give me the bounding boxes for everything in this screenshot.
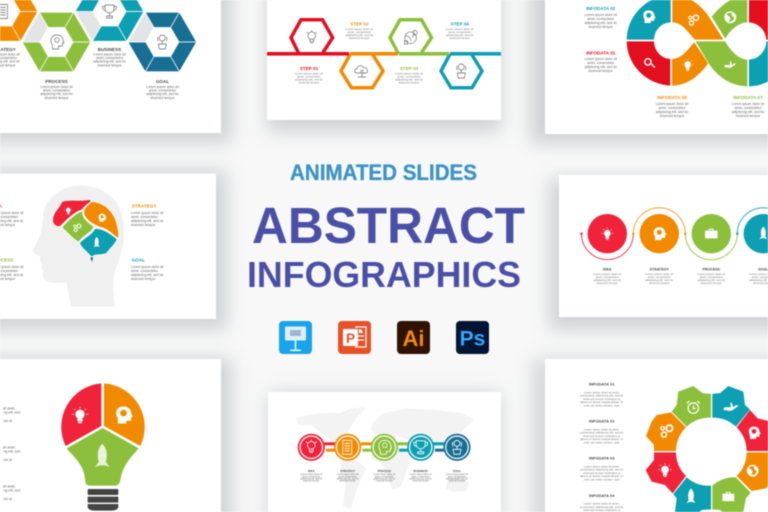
process text: eiusmod tempor [701, 281, 722, 285]
infodata 02 text: eiusmod tempor incididunt ut [583, 434, 620, 438]
infodata 07 text: INFODATA 07 [733, 95, 763, 100]
step 04 text: STEP 04 [451, 22, 469, 26]
map strategy text [337, 469, 359, 483]
infodata 01 text: INFODATA 01 [589, 382, 615, 386]
strategy text: Lorem ipsum dolor sit [131, 211, 163, 215]
light bulb [61, 383, 145, 511]
map circle idea [298, 434, 325, 461]
strategy text: STRATEGY [650, 268, 670, 272]
infodata 02 text: adipiscing elit, sed do [584, 21, 617, 25]
step 03 text: adipiscing elit, sed do [395, 78, 423, 82]
left text 3: ore at [3, 497, 12, 501]
step hexagon 4 [441, 54, 482, 88]
goal text [131, 258, 164, 281]
left text 3: sit amet, [3, 484, 16, 488]
infodata 02 text: amet, consectetur [587, 17, 615, 21]
panel: hexagon process slide [0, 0, 232, 143]
head and brain [33, 186, 124, 307]
map business text: adipiscing elit, sed do [410, 478, 432, 480]
infodata 03 text: consectetur adipiscing elit, sed do [580, 468, 624, 472]
map goal text: adipiscing elit, sed do [446, 478, 469, 480]
infodata 04 text: INFODATA 04 [589, 493, 615, 498]
step 03 text: STEP 03 [400, 66, 419, 71]
label: process: amet, consectetur [43, 89, 71, 93]
label: goal: GOAL [156, 79, 169, 84]
infodata 08 text [656, 95, 688, 118]
icon: illustrator: Ai [402, 326, 424, 351]
map strategy text: STRATEGY [340, 469, 355, 473]
step 03 text [395, 66, 423, 84]
infodata 01 text: INFODATA 01 [586, 50, 616, 56]
hexagon: goal [128, 12, 197, 72]
circle panel card [559, 175, 768, 317]
infodata 03 text: eiusmod tempor incididunt ut [583, 471, 620, 475]
infodata 07 text [732, 95, 764, 118]
infodata 01 text: adipiscing elit, sed do [584, 65, 617, 69]
infodata 02 text: enim ad minim veniam, quis [584, 440, 620, 444]
strategy text: Lorem ipsum dolor sit [645, 272, 673, 276]
connecting path [582, 208, 768, 260]
connector bars [324, 442, 446, 452]
process text [0, 258, 24, 281]
step 02 text: STEP 02 [350, 22, 369, 26]
title line 2: INFOGRAPHICS [247, 254, 521, 295]
idea text [593, 268, 622, 285]
map circle business [407, 434, 434, 461]
strategy text: adipiscing elit, sed do [131, 219, 164, 223]
icon: powerpoint [338, 321, 371, 354]
bulb panel card [0, 359, 221, 512]
circle panel shadow [549, 178, 768, 330]
path nodes [580, 232, 739, 235]
timeline panel card [267, 0, 501, 120]
title line 1: ABSTRACT [252, 197, 525, 254]
step 02 text: Lorem ipsum dolor sit [345, 27, 373, 31]
step hexagon 1 [291, 20, 333, 54]
label: business [93, 47, 126, 67]
step 01 text: STEP 01 [300, 66, 319, 71]
map idea text: amet, consectetur [302, 475, 321, 478]
map process text: amet, consectetur [375, 475, 394, 478]
infodata 07 text: amet, consectetur [735, 106, 762, 110]
hexagon: strategy [0, 0, 38, 41]
label: process: PROCESS [45, 79, 68, 84]
map goal text: eiusmod tempor [449, 480, 465, 483]
map idea text: eiusmod tempor [303, 480, 320, 483]
strategy text [131, 204, 164, 227]
step 03 text: Lorem ipsum dolor sit [395, 72, 423, 76]
infodata 08 text: Lorem ipsum dolor sit [656, 102, 688, 106]
infodata 01 text: amet, consectetur [587, 61, 615, 65]
map idea text: IDEA [308, 469, 315, 473]
map business text: BUSINESS [414, 469, 428, 473]
strategy text: amet, consectetur [648, 275, 671, 279]
infodata 04 text [580, 493, 624, 512]
icon: powerpoint: P [346, 331, 355, 346]
infodata 01 text: Lorem ipsum dolor sit amet, [584, 390, 620, 394]
infodata 08 text: adipiscing elit, sed do [656, 110, 688, 114]
idea text: IDEA [603, 268, 612, 272]
label: process: Lorem ipsum dolor sit [40, 85, 73, 89]
left text 1: ng elit, sed [4, 410, 20, 414]
step 01 text [295, 66, 323, 84]
infinity panel shadow [530, 0, 768, 144]
step 01 text: eiusmod tempor [299, 80, 319, 84]
idea text [0, 204, 24, 227]
timeline panel shadow [267, 0, 501, 132]
infodata 03 text: INFODATA 03 [589, 456, 615, 460]
circle: idea [588, 214, 627, 253]
step 02 text: adipiscing elit, sed do [345, 33, 374, 37]
step 02 text: amet, consectetur [348, 30, 371, 34]
goal text: Lorem ipsum dolor sit [131, 265, 163, 269]
infodata 01 text: enim ad minim veniam, quis [584, 404, 620, 408]
bulb icons [72, 406, 133, 467]
label: process [40, 79, 73, 100]
gear panel shadow [532, 358, 768, 512]
idea text: Lorem ipsum dolor sit [593, 272, 621, 276]
map strategy text: eiusmod tempor [339, 480, 356, 483]
map idea text: Lorem ipsum dolor sit [300, 473, 323, 476]
infodata 02 text: consectetur adipiscing elit, sed do [580, 431, 624, 435]
goal text [749, 268, 768, 285]
map business text: eiusmod tempor [412, 480, 429, 483]
panel: step timeline slide [267, 0, 501, 132]
left text 2: sit amet, [3, 446, 16, 450]
left text 3: ng elit, sed [4, 488, 20, 492]
goal text: adipiscing elit, sed do [131, 273, 164, 277]
infodata 02 text [584, 6, 617, 29]
label: business: adipiscing elit, sed do [93, 60, 126, 64]
bulb panel shadow [0, 358, 232, 512]
label: goal: Lorem ipsum dolor sit [146, 85, 179, 89]
step 01 text: amet, consectetur [298, 74, 321, 78]
map circle strategy [334, 434, 361, 461]
gear ring [646, 386, 768, 512]
hexagon panel card [0, 0, 221, 133]
world map [296, 407, 474, 508]
infodata 08 text: amet, consectetur [659, 106, 686, 110]
map process text: eiusmod tempor [376, 480, 393, 483]
step 03 text: amet, consectetur [398, 74, 421, 78]
map business text: amet, consectetur [412, 475, 430, 478]
step 03 text: eiusmod tempor [399, 80, 419, 84]
label: process: adipiscing elit, sed do [40, 92, 73, 96]
panel: circle path slide [549, 175, 768, 330]
process text [697, 268, 726, 285]
infodata 03 text: enim ad minim veniam, quis [584, 478, 620, 482]
label: process: eiusmod tempor [44, 96, 70, 100]
timeline line [267, 52, 501, 56]
circle: strategy [640, 214, 679, 253]
infodata 01 text: Lorem ipsum dolor sit [584, 57, 617, 61]
step 02 text [345, 22, 374, 40]
map strategy text: Lorem ipsum dolor sit [337, 473, 359, 476]
gear panel card [545, 359, 768, 512]
map strategy text: amet, consectetur [339, 475, 357, 478]
circle: process [692, 214, 731, 253]
infodata 03 text [580, 456, 624, 482]
strategy text: eiusmod tempor [131, 223, 156, 227]
map process text: PROCESS [377, 469, 391, 473]
map idea text: adipiscing elit, sed do [300, 478, 323, 480]
process text: adipiscing elit, sed do [697, 278, 726, 282]
panel: light bulb slide [0, 358, 232, 512]
infodata 03 text: labore et dolore magna aliqua. Ut [580, 474, 623, 478]
icon: keynote [279, 321, 312, 354]
gear icons [658, 401, 761, 503]
label: goal: adipiscing elit, sed do [146, 92, 179, 96]
panel: world map slide [268, 392, 501, 512]
infodata 07 text: eiusmod tempor [736, 114, 761, 118]
idea text: adipiscing elit, sed do [593, 278, 622, 282]
infodata 07 text: adipiscing elit, sed do [732, 110, 764, 114]
infodata 02 text: INFODATA 02 [589, 418, 615, 424]
circle icons [601, 227, 767, 240]
map circle process [371, 434, 398, 461]
goal text: amet, consectetur [131, 269, 159, 273]
step 04 text [446, 22, 474, 40]
infodata 04 text: Lorem ipsum dolor sit amet, [584, 502, 620, 506]
map strategy text: adipiscing elit, sed do [337, 478, 359, 480]
map process text: adipiscing elit, sed do [373, 478, 396, 480]
infinity panel card [545, 0, 768, 134]
infodata 01 text: eiusmod tempor incididunt ut [583, 397, 620, 401]
label: goal: eiusmod tempor [150, 96, 176, 100]
step hexagon 3 [390, 20, 432, 54]
idea text: eiusmod tempor [597, 281, 618, 285]
hexagon: business [75, 0, 144, 41]
step 01 text: adipiscing elit, sed do [295, 78, 323, 82]
subtitle: ANIMATED SLIDES [290, 160, 477, 185]
map goal text: GOAL [453, 469, 461, 473]
goal text: GOAL [132, 258, 145, 262]
brain panel shadow [0, 170, 227, 330]
step 01 text: Lorem ipsum dolor sit [295, 72, 323, 76]
map panel shadow [268, 392, 501, 512]
hexagon panel shadow [0, 0, 232, 143]
map process text [373, 469, 396, 483]
brain icons [64, 206, 106, 247]
step 04 text: adipiscing elit, sed do [446, 33, 474, 37]
step icons [307, 30, 466, 78]
map goal text [446, 469, 469, 483]
infinity shape [626, 0, 768, 87]
circle: goal [744, 214, 768, 253]
infinity icons [643, 10, 736, 71]
step hexagon 2 [341, 54, 383, 88]
left text 2 [3, 446, 20, 462]
map goal text: amet, consectetur [448, 475, 466, 478]
label: business: BUSINESS [98, 47, 121, 52]
map panel card [268, 392, 501, 512]
goal text: eiusmod tempor [131, 277, 156, 281]
left text 2: ore at [3, 458, 12, 462]
infodata 01 text: eiusmod tempor [589, 69, 614, 73]
map process text: Lorem ipsum dolor sit [373, 473, 396, 476]
infodata 02 text: labore et dolore magna aliqua. Ut [580, 437, 623, 441]
infodata 03 text: Lorem ipsum dolor sit amet, [584, 464, 620, 468]
strategy text: amet, consectetur [131, 215, 159, 219]
infodata 01 text [584, 50, 617, 73]
map goal text: Lorem ipsum dolor sit [446, 473, 468, 476]
map idea text [300, 469, 323, 483]
left text 1: sit amet, [3, 406, 16, 410]
process text: amet, consectetur [700, 275, 723, 279]
hexagon: process [22, 12, 91, 72]
left text 2: ng elit, sed [4, 450, 20, 454]
map business text: Lorem ipsum dolor sit [410, 473, 432, 476]
label: goal [146, 79, 179, 100]
icon: photoshop: Ps [460, 328, 485, 350]
strategy text: adipiscing elit, sed do [645, 278, 674, 282]
step 04 text: Lorem ipsum dolor sit [446, 27, 474, 31]
step 02 text: eiusmod tempor [349, 36, 370, 40]
infodata 02 text: eiusmod tempor [589, 25, 614, 29]
label: business: eiusmod tempor [97, 63, 123, 67]
label: business: Lorem ipsum dolor sit [93, 52, 126, 56]
step 04 text: eiusmod tempor [449, 36, 470, 40]
infodata 01 text [580, 382, 624, 408]
infodata 08 text: INFODATA 08 [657, 95, 687, 100]
left text 1 [3, 406, 20, 423]
brain panel card [0, 174, 216, 319]
infodata 02 text: Lorem ipsum dolor sit amet, [584, 427, 620, 431]
infodata 04 text: consectetur adipiscing elit, sed do [580, 505, 624, 509]
strategy text: STRATEGY [132, 204, 156, 208]
infodata 07 text: Lorem ipsum dolor sit [732, 102, 764, 106]
panel: gear slide [532, 358, 768, 512]
infodata 02 text: INFODATA 02 [586, 6, 616, 11]
map business text [410, 469, 432, 483]
panel: infinity loop slide [530, 0, 768, 144]
infodata 01 text: labore et dolore magna aliqua. Ut [580, 400, 623, 404]
infodata 02 text [580, 418, 624, 444]
panel: brain slide [0, 170, 227, 330]
infodata 08 text: eiusmod tempor [660, 114, 685, 118]
label: business: amet, consectetur [96, 56, 124, 60]
left text 1: ore at [3, 419, 12, 423]
strategy text: eiusmod tempor [649, 281, 670, 285]
label: goal: amet, consectetur [149, 89, 177, 93]
map circle goal [443, 434, 471, 461]
idea text: amet, consectetur [596, 275, 619, 279]
process text: PROCESS [703, 268, 721, 272]
infodata 01 text: consectetur adipiscing elit, sed do [580, 394, 624, 398]
icon: illustrator [397, 321, 430, 354]
icon: photoshop [456, 321, 489, 354]
infodata 02 text: Lorem ipsum dolor sit [584, 13, 617, 17]
label: strategy [0, 47, 20, 67]
strategy text [645, 268, 674, 285]
process text: Lorem ipsum dolor sit [697, 272, 725, 276]
step 04 text: amet, consectetur [448, 30, 471, 34]
left text 3 [3, 484, 20, 501]
